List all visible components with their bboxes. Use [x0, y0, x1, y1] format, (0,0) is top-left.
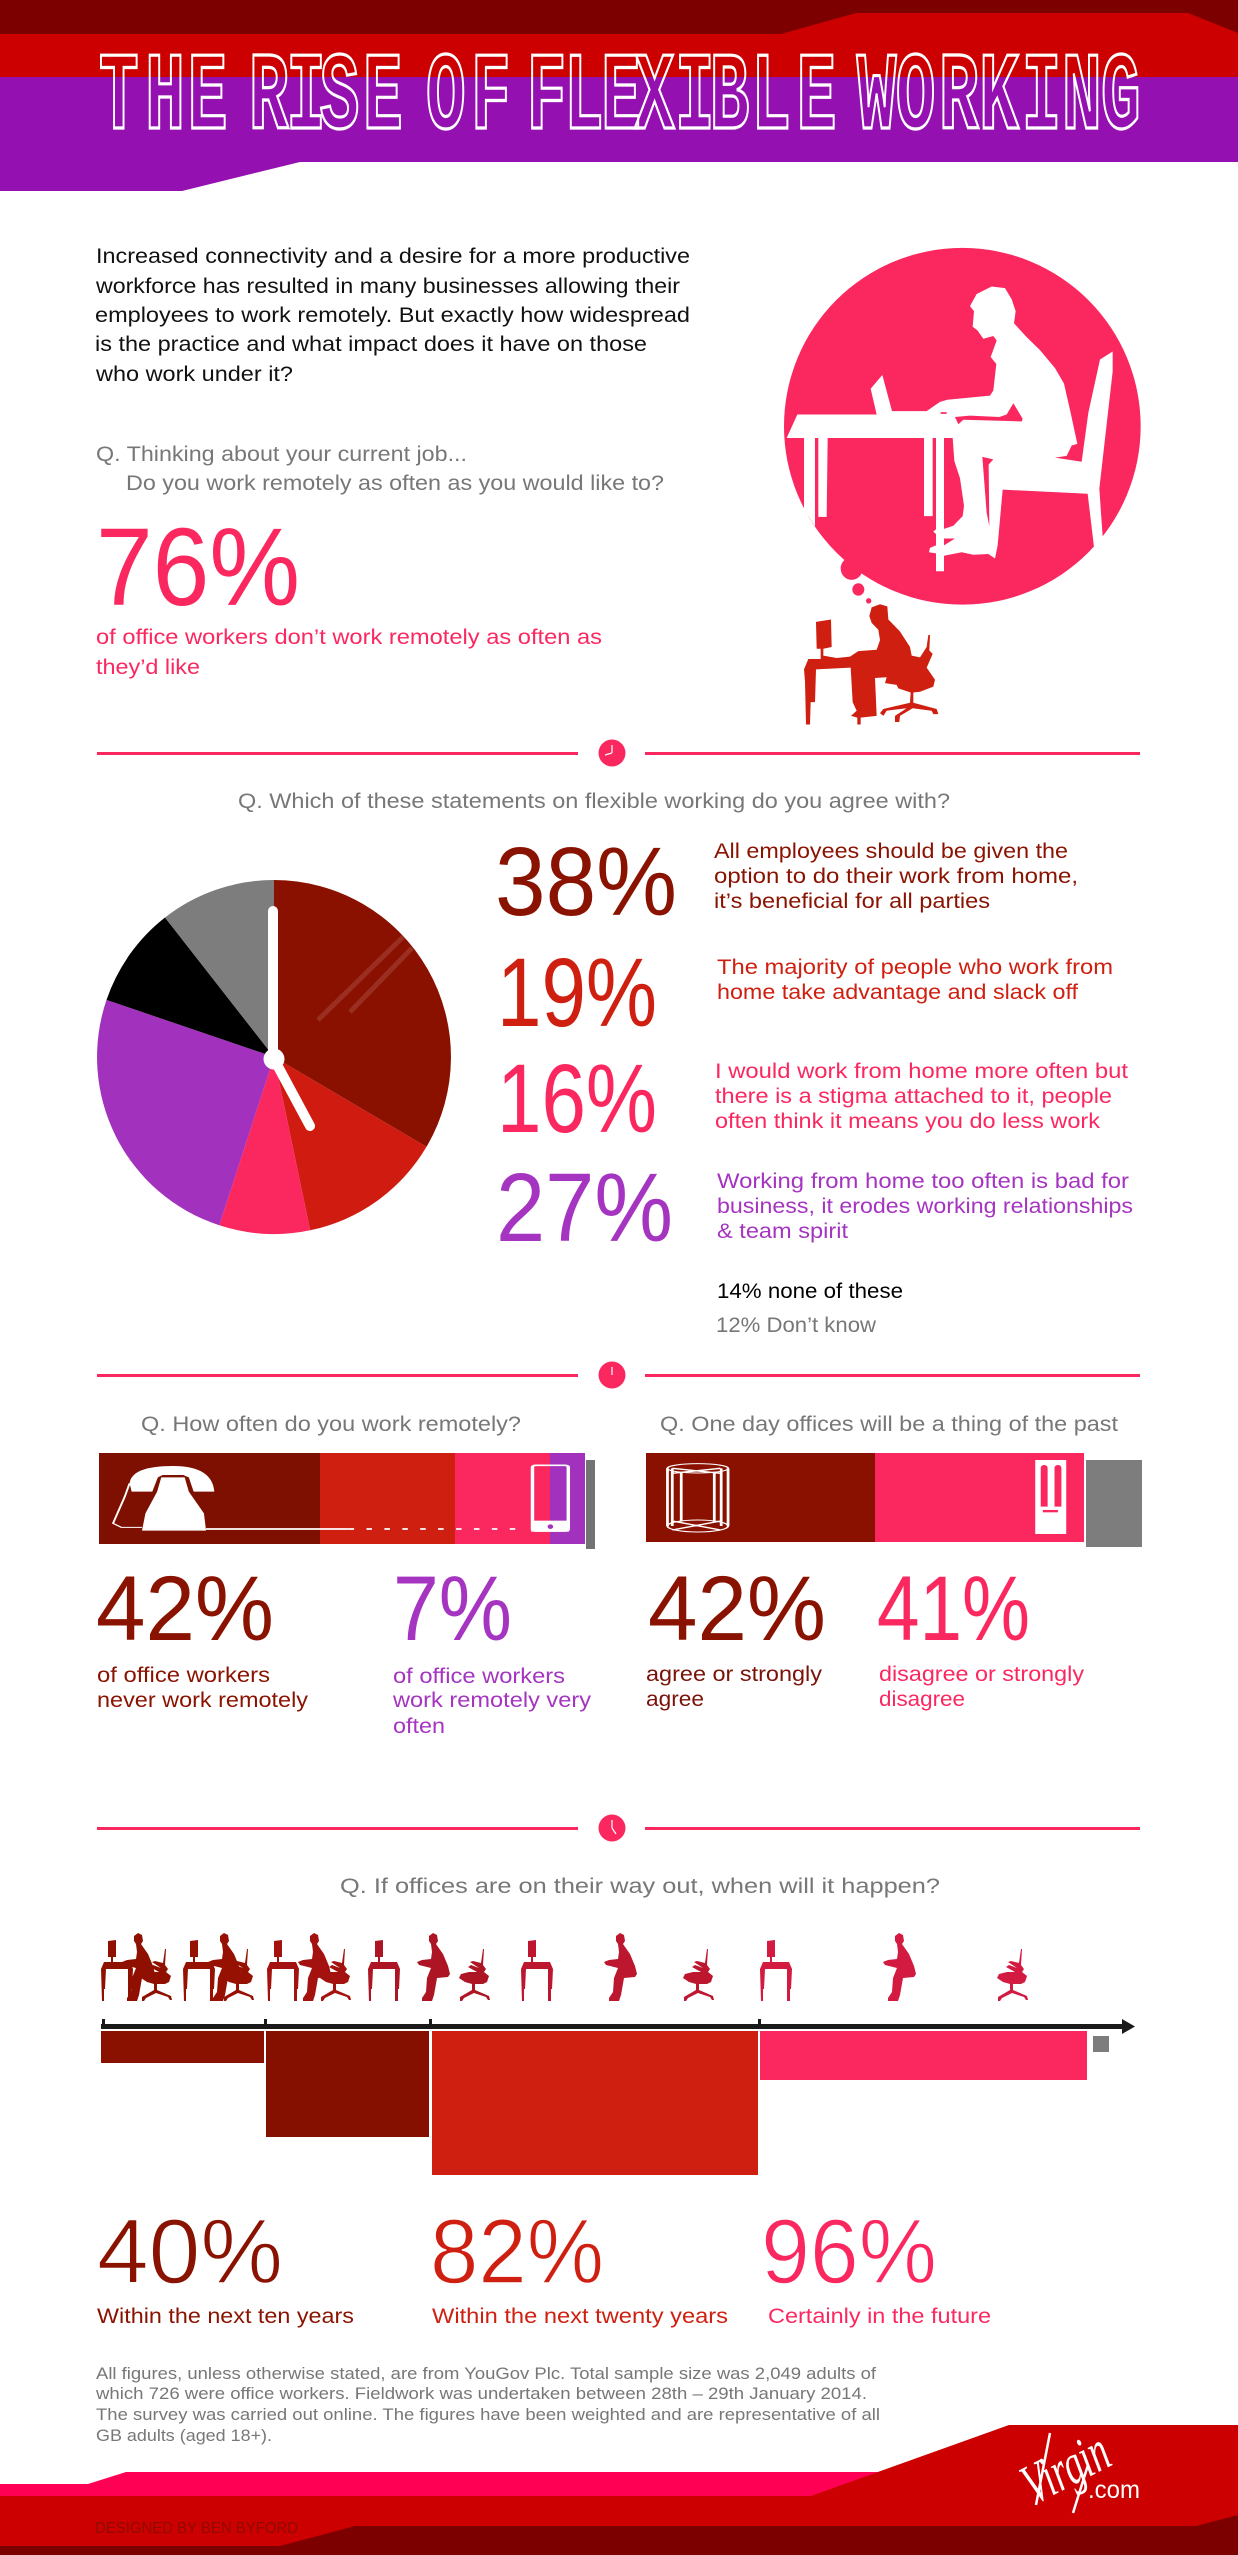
statistic: 38% all employees: All employees should be given the — [714, 840, 1068, 863]
footer banner — [0, 2425, 1238, 2555]
statistic: 7% very often: often — [393, 1715, 445, 1738]
statistic: 40%: Within the next ten years — [97, 2305, 354, 2328]
designer credit: DESIGNED BY BEN BYFORD — [95, 2520, 298, 2537]
bar: offices a thing of the past — [646, 1453, 1142, 1547]
footnote: The survey was carried out online. The figures have been weighted and are representative of all — [96, 2405, 880, 2424]
thought bubble — [784, 248, 1141, 605]
stat: 76%: 76% — [96, 506, 300, 629]
statistic: 41% disagree: disagree — [879, 1688, 965, 1711]
statistic: 42% agree: agree or strongly — [646, 1663, 823, 1686]
statistic: 82%: Within the next twenty years — [432, 2305, 728, 2328]
statistic: 19% slack off — [497, 938, 1113, 1047]
statistic: 82% — [430, 2201, 728, 2328]
statistic: 16% stigma: I would work from home more often but — [715, 1060, 1128, 1083]
footnote: All figures, unless otherwise stated, are from YouGov Plc. Total sample size was 2,049 adults of — [96, 2364, 876, 2383]
title: THE — [99, 37, 227, 162]
icon: revolving door — [667, 1464, 728, 1532]
statistic: 38% all employees: it’s beneficial for all parties — [714, 890, 990, 913]
question: thinking about your current job — [96, 443, 664, 495]
title: OF — [426, 37, 511, 162]
question: thinking about your current job: Do you work remotely as often as you would like to? — [126, 472, 664, 495]
statistic: 40% — [97, 2201, 354, 2328]
statistic: 38% all employees: option to do their work from home, — [714, 865, 1078, 888]
statistic: 19% slack off: The majority of people who work from — [717, 956, 1113, 979]
stat: 76%: of office workers don’t work remotely as often as — [96, 626, 602, 649]
statistic: 82%: 82% — [430, 2201, 604, 2303]
statistic: 41% disagree — [877, 1558, 1085, 1711]
other answers — [716, 1280, 903, 1337]
icon: mobile phone — [531, 1465, 569, 1532]
statistic: 19% slack off: home take advantage and slack off — [717, 981, 1078, 1004]
divider with clock 3 — [97, 1814, 1140, 1842]
statistic: 27% bad for business — [496, 1153, 1133, 1262]
virgin logo: .com — [1088, 2476, 1140, 2504]
statistic: 41% disagree: 41% — [877, 1558, 1030, 1660]
timeline bars — [101, 2031, 1109, 2175]
intro text: Increased connectivity and a desire for a more productive — [96, 245, 690, 268]
divider with clock 2 — [97, 1362, 1140, 1388]
title: RISE — [249, 37, 403, 162]
question: offices a thing of the past: Q. One day offices will be a thing of the past — [660, 1413, 1118, 1436]
statistic: 27% bad for business: Working from home too often is bad for — [717, 1170, 1129, 1193]
intro text: workforce has resulted in many businesses allowing their — [95, 275, 680, 298]
statistic: 40%: 40% — [97, 2201, 283, 2303]
statistic: 41% disagree: disagree or strongly — [879, 1663, 1085, 1686]
intro text — [95, 245, 690, 386]
title — [99, 37, 1141, 162]
statistic: 42% never work remotely — [96, 1558, 309, 1712]
stat: 76% — [96, 506, 602, 679]
statistic: 96% — [761, 2201, 991, 2328]
divider with clock 1 — [97, 740, 1140, 766]
statistic: 7% very often: 7% — [393, 1558, 512, 1660]
statistic: 27% bad for business: 27% — [496, 1153, 673, 1262]
bar: how often work remotely — [99, 1453, 595, 1549]
timeline figures — [101, 1933, 1028, 2001]
pie chart clock — [97, 880, 451, 1234]
timeline arrow — [101, 2019, 1135, 2034]
statistic: 42% agree: agree — [646, 1688, 704, 1711]
statistic: 27% bad for business: business, it erodes working relationships — [717, 1195, 1133, 1218]
other answers: 12% Don’t know — [716, 1314, 877, 1337]
statistic: 19% slack off: 19% — [497, 938, 657, 1047]
footnote: GB adults (aged 18+). — [96, 2426, 272, 2445]
cut-outs in silhouette — [941, 403, 1023, 545]
intro text: employees to work remotely. But exactly how widespread — [95, 304, 690, 327]
question: statements on flexible working: Q. Which of these statements on flexible working do you agree with? — [238, 790, 950, 813]
statistic: 96%: Certainly in the future — [768, 2305, 991, 2328]
icon: door — [1035, 1460, 1066, 1534]
stat: 76%: they’d like — [96, 656, 200, 679]
cable to mobile — [113, 1483, 528, 1529]
statistic: 7% very often: work remotely very — [392, 1689, 592, 1712]
intro text: who work under it? — [95, 363, 293, 386]
statistic: 38% all employees: 38% — [495, 827, 677, 936]
statistic: 16% stigma: there is a stigma attached to it, people — [715, 1085, 1112, 1108]
statistic: 7% very often: of office workers — [393, 1665, 565, 1688]
question: how often: Q. How often do you work remotely? — [141, 1413, 521, 1436]
other answers: 14% none of these — [717, 1280, 903, 1303]
intro text: is the practice and what impact does it have on those — [95, 333, 647, 356]
statistic: 7% very often — [392, 1558, 592, 1738]
footnote: which 726 were office workers. Fieldwork was undertaken between 28th – 29th January 2014. — [95, 2384, 867, 2403]
statistic: 16% stigma: 16% — [497, 1044, 657, 1153]
statistic: 42% never work remotely: of office workers — [97, 1664, 270, 1687]
illustration: thought bubble with remote worker — [784, 248, 1141, 724]
statistic: 16% stigma — [497, 1044, 1128, 1153]
question: when will it happen: Q. If offices are on their way out, when will it happen? — [340, 1875, 940, 1898]
icon: telephone — [130, 1466, 214, 1531]
statistic: 42% agree: 42% — [648, 1558, 826, 1660]
statistic: 38% all employees — [495, 827, 1078, 936]
icon: small office worker — [804, 604, 938, 724]
statistic: 42% agree — [646, 1558, 826, 1711]
icon: worker at laptop — [787, 286, 1113, 571]
statistic: 16% stigma: often think it means you do less work — [715, 1110, 1101, 1133]
statistic: 96%: 96% — [761, 2201, 937, 2303]
footnote — [95, 2364, 880, 2445]
header banner — [0, 0, 1238, 191]
question: thinking about your current job: Q. Thinking about your current job... — [96, 443, 467, 466]
title: FLEXIBLE — [527, 37, 836, 162]
virgin logo: Virgin — [1011, 2420, 1120, 2517]
statistic: 42% never work remotely: 42% — [96, 1558, 274, 1660]
statistic: 27% bad for business: & team spirit — [717, 1220, 848, 1243]
statistic: 42% never work remotely: never work remotely — [97, 1689, 309, 1712]
title: WORKING — [857, 37, 1141, 162]
